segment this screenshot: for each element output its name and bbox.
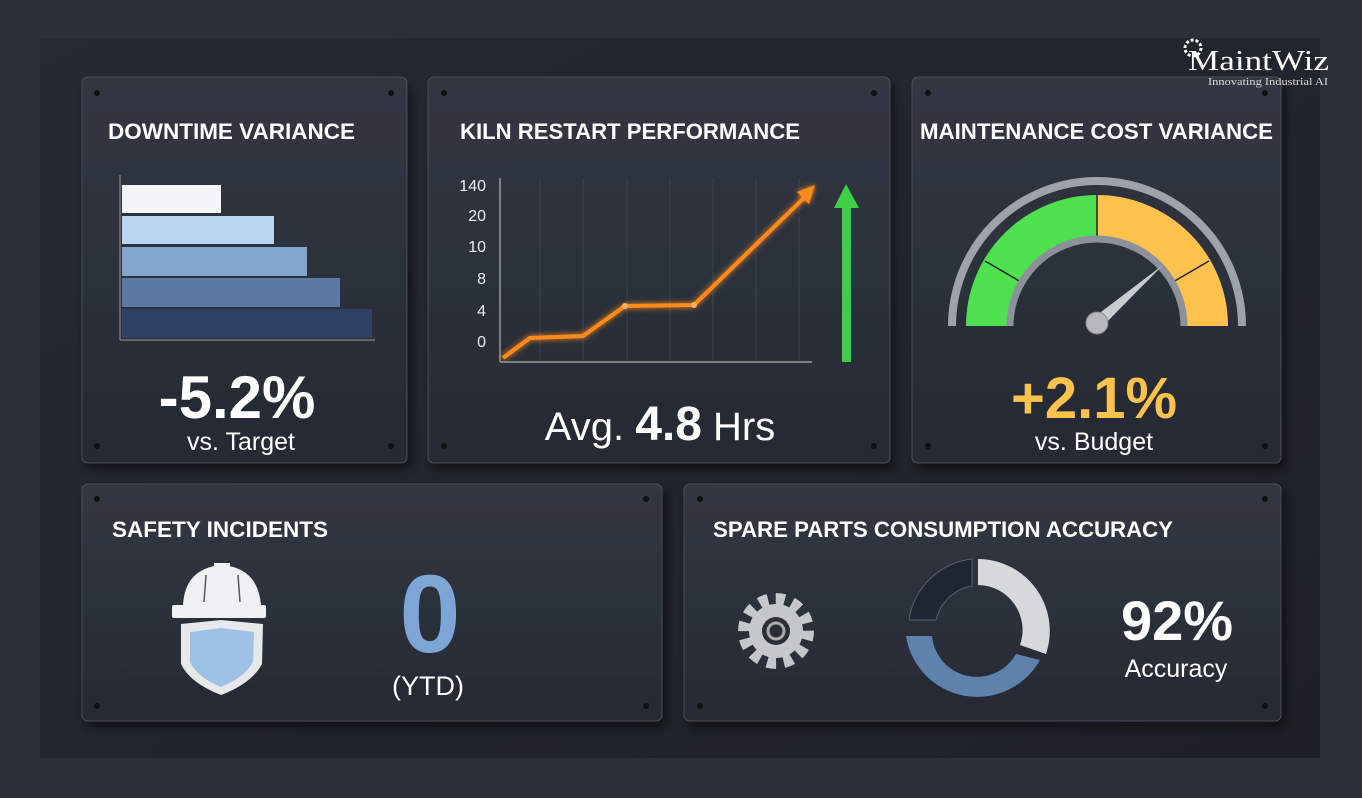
panel: downtime variance xyxy=(82,77,407,463)
icon: gear xyxy=(744,599,808,663)
line chart: 140 xyxy=(459,178,486,195)
value: -5.2% xyxy=(159,364,315,431)
panel: downtime variance: vs. Target xyxy=(187,428,295,456)
panel: safety incidents xyxy=(82,484,662,721)
heading: SPARE PARTS CONSUMPTION ACCURACY xyxy=(713,517,1173,542)
line chart: 10 xyxy=(468,239,486,256)
panel: safety incidents: (YTD) xyxy=(392,671,464,701)
arrow: green up xyxy=(834,184,859,362)
line chart: 20 xyxy=(468,208,486,225)
heading: SAFETY INCIDENTS xyxy=(112,517,328,542)
value: 0 xyxy=(399,553,461,676)
heading: DOWNTIME VARIANCE xyxy=(108,119,355,144)
value: 92% xyxy=(1121,589,1233,652)
bar chart xyxy=(120,175,375,340)
logo: MaintWiz xyxy=(1185,40,1329,88)
logo: MaintWiz: MaintWiz xyxy=(1188,45,1329,77)
heading: MAINTENANCE COST VARIANCE xyxy=(920,119,1273,144)
panel: maintenance cost variance xyxy=(912,77,1281,463)
value: +2.1% xyxy=(1011,366,1177,431)
panel: kiln restart performance xyxy=(428,77,890,463)
line chart xyxy=(459,178,815,362)
panel: spare parts consumption accuracy xyxy=(684,484,1281,721)
icon: helmet with shield xyxy=(172,563,266,695)
value: Avg. 4.8 Hrs xyxy=(545,398,775,451)
panel: spare parts consumption accuracy: Accuracy xyxy=(1125,655,1228,683)
line chart: 0 xyxy=(477,334,486,351)
panel: maintenance cost variance: vs. Budget xyxy=(1035,428,1153,456)
line chart: 8 xyxy=(477,271,486,288)
donut chart xyxy=(906,559,1050,697)
heading: KILN RESTART PERFORMANCE xyxy=(460,119,800,144)
line chart: 4 xyxy=(477,303,486,320)
gauge xyxy=(952,181,1242,334)
logo: MaintWiz: Innovating Industrial AI xyxy=(1208,76,1328,88)
